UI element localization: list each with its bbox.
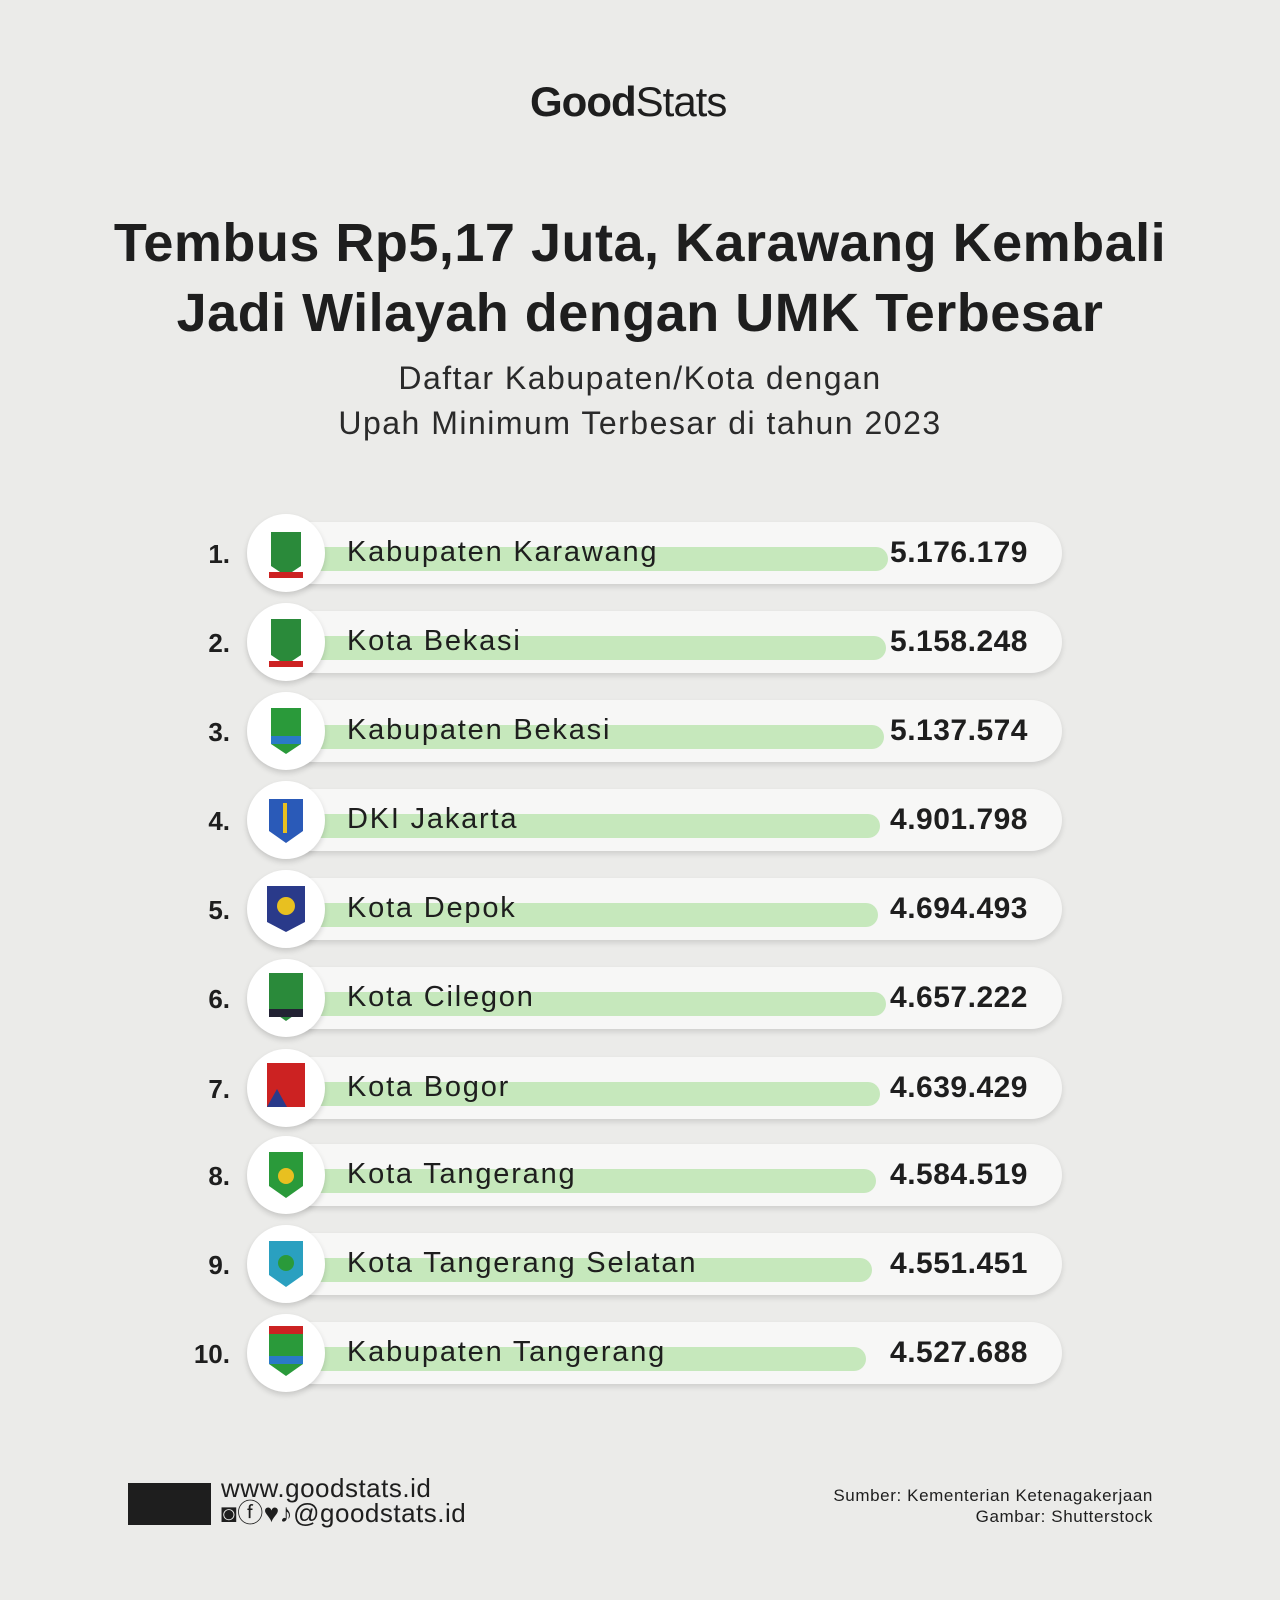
row 6 (208, 959, 1064, 1042)
footer: black box (128, 1483, 211, 1525)
row 5: Kota Depok (347, 892, 517, 924)
row 3: 5.137.574 (890, 714, 1028, 747)
row 10: Kabupaten Tangerang (347, 1336, 666, 1368)
row 10 (194, 1314, 1064, 1397)
row 2 (208, 603, 1064, 686)
subtitle: Upah Minimum Terbesar di tahun 2023 (338, 405, 942, 441)
row 10: 10. (194, 1339, 230, 1369)
row 4: 4. (208, 806, 230, 836)
ranking list (194, 514, 1064, 1397)
row 7: 7. (208, 1074, 230, 1104)
row 1: Kabupaten Karawang (347, 536, 658, 568)
row 1: 5.176.179 (890, 536, 1028, 569)
row 6: 6. (208, 984, 230, 1014)
title (114, 213, 1166, 343)
row 8 (208, 1136, 1064, 1219)
row 4: DKI Jakarta (347, 803, 518, 835)
row 2: Kota Bekasi (347, 625, 522, 657)
footer: source (833, 1486, 1153, 1526)
row 6: 4.657.222 (890, 981, 1028, 1014)
row 9: Kota Tangerang Selatan (347, 1247, 697, 1279)
row 3: Kabupaten Bekasi (347, 714, 611, 746)
footer: source: Sumber: Kementerian Ketenagakerjaan (833, 1486, 1153, 1505)
row 8: Kota Tangerang (347, 1158, 576, 1190)
row 10: 4.527.688 (890, 1336, 1028, 1369)
row 9: 9. (208, 1250, 230, 1280)
row 3: 3. (208, 717, 230, 747)
row 7: Kota Bogor (347, 1071, 510, 1103)
row 5 (208, 870, 1064, 953)
row 5: 4.694.493 (890, 892, 1028, 925)
title: Tembus Rp5,17 Juta, Karawang Kembali (114, 213, 1166, 273)
row 2: 5.158.248 (890, 625, 1028, 658)
title: Jadi Wilayah dengan UMK Terbesar (177, 283, 1103, 343)
row 8: 4.584.519 (890, 1158, 1028, 1191)
row 1: 1. (208, 539, 230, 569)
subtitle: Daftar Kabupaten/Kota dengan (398, 360, 882, 396)
row 5: 5. (208, 895, 230, 925)
logo: GoodStats: GoodStats (530, 78, 726, 125)
footer: website and socials: ◙ⓕ♥♪@goodstats.id (221, 1498, 466, 1528)
row 1 (208, 514, 1064, 597)
row 9: 4.551.451 (890, 1247, 1028, 1280)
footer: website and socials (221, 1473, 466, 1528)
row 8: 8. (208, 1161, 230, 1191)
row 9 (208, 1225, 1064, 1308)
row 4: 4.901.798 (890, 803, 1028, 836)
row 2: 2. (208, 628, 230, 658)
row 3 (208, 692, 1064, 775)
row 4 (208, 781, 1064, 864)
row 6: Kota Cilegon (347, 981, 535, 1013)
footer: source: Gambar: Shutterstock (976, 1507, 1153, 1526)
subtitle (338, 360, 942, 441)
footer: website and socials: www.goodstats.id (221, 1473, 431, 1503)
row 7 (208, 1049, 1064, 1132)
row 7: 4.639.429 (890, 1071, 1028, 1104)
